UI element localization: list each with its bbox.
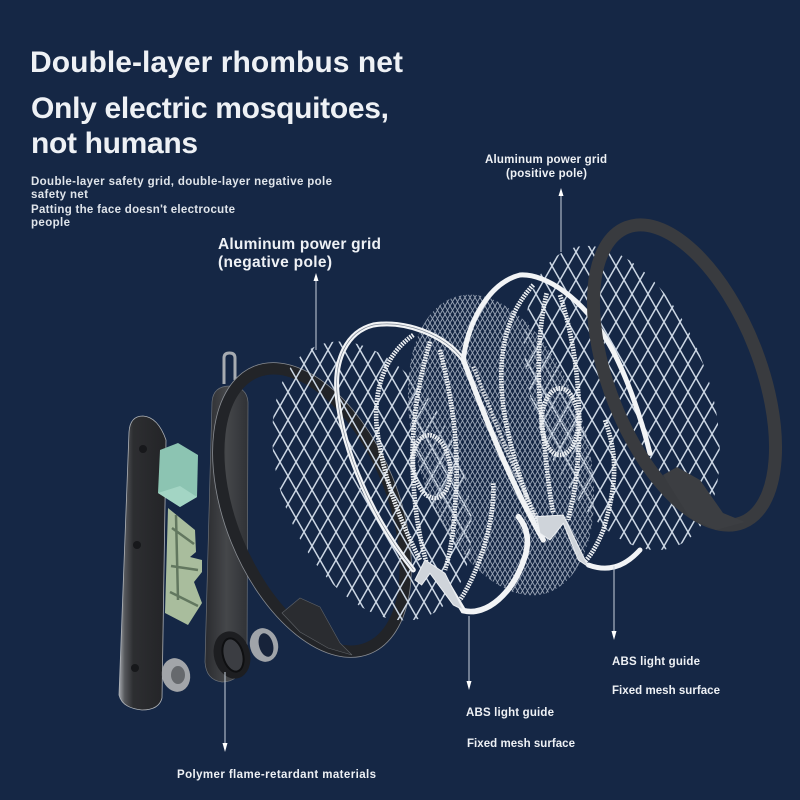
washer — [246, 625, 282, 665]
arrow: negative pole — [314, 273, 318, 350]
label: positive pole grid: Aluminum power grid — [485, 154, 607, 166]
front frame inner ribs — [376, 335, 493, 600]
fine mesh — [408, 294, 594, 596]
icon: hook — [224, 353, 235, 384]
label: positive pole grid — [485, 154, 607, 180]
right mesh — [524, 246, 720, 550]
description: people — [31, 217, 70, 229]
label: ABS guide 2: ABS light guide — [612, 656, 700, 668]
subtitle: Only electric mosquitoes, — [31, 92, 389, 125]
description — [31, 176, 332, 229]
label: positive pole grid: (positive pole) — [506, 168, 587, 180]
rear frame inner ribs — [501, 285, 614, 563]
label: ABS guide 1: Fixed mesh surface — [467, 738, 575, 750]
label: negative pole grid: Aluminum power grid — [218, 236, 381, 253]
label: ABS guide 1 — [466, 707, 575, 750]
left mesh — [272, 342, 472, 620]
left cover — [119, 416, 166, 710]
label: negative pole grid: (negative pole) — [218, 254, 332, 271]
arrow: ABS guide 1 — [466, 616, 472, 690]
right black ring — [556, 200, 800, 550]
rear clasp — [537, 515, 588, 567]
arrow: ABS guide 2 — [612, 566, 616, 640]
description: Patting the face doesn't electrocute — [31, 204, 235, 216]
arrow: positive pole — [558, 188, 564, 252]
label: ABS guide 2: Fixed mesh surface — [612, 685, 720, 697]
label: polymer: Polymer flame-retardant materials — [177, 769, 376, 781]
label: ABS guide 1: ABS light guide — [466, 707, 554, 719]
battery — [158, 443, 198, 507]
handle body — [205, 353, 248, 682]
label: negative pole grid — [218, 236, 381, 271]
circuit board — [165, 508, 202, 625]
ring hub — [282, 598, 352, 655]
front frame outer — [337, 324, 527, 612]
cover screws — [131, 445, 147, 672]
collar ring — [208, 627, 256, 683]
ring hub — [663, 467, 745, 530]
arrow: polymer — [222, 672, 228, 752]
label: ABS guide 2 — [612, 656, 720, 697]
description: safety net — [31, 189, 88, 201]
white frames — [337, 275, 650, 612]
left black ring — [173, 334, 451, 686]
title: Double-layer rhombus net — [30, 46, 403, 79]
rear frame outer — [463, 275, 650, 568]
subtitle line 2: not humans — [31, 127, 198, 160]
description: Double-layer safety grid, double-layer negative pole — [31, 176, 332, 188]
front clasp — [415, 560, 463, 610]
gear — [158, 655, 194, 695]
